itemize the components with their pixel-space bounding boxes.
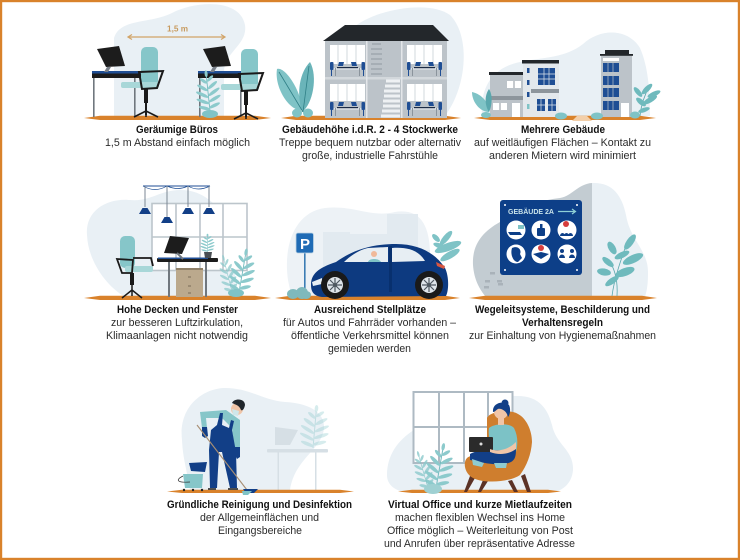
left chair: [121, 47, 163, 117]
light wall: [592, 183, 648, 297]
caption: Gebäudehöhe i.d.R. 2 - 4 Stockwerke: [282, 124, 458, 136]
desk: [157, 236, 218, 297]
left plant: [472, 89, 492, 118]
caption: [106, 304, 248, 342]
chair body: [465, 411, 532, 482]
head: [231, 403, 243, 415]
fern plant: [193, 69, 223, 118]
ground: [281, 116, 461, 120]
caption: und Anrufen über repräsentative Adresse: [384, 538, 575, 550]
bushes: [555, 112, 640, 120]
ground: [84, 116, 271, 120]
icon: no handshake: [532, 244, 550, 264]
caption: [167, 499, 352, 537]
gloves: [202, 427, 240, 459]
background blob: [287, 208, 430, 297]
icon: no groups: [558, 220, 576, 240]
armchair: [464, 411, 532, 492]
panel: Geräumige Büros: [84, 4, 271, 149]
caption: zur besseren Luftzirkulation,: [111, 317, 243, 329]
caption: [283, 304, 456, 355]
shirt and arms: [200, 410, 240, 448]
caption: machen flexiblen Wechsel ins Home: [395, 512, 565, 524]
sign: GEBÄUDE 2A: [508, 208, 554, 216]
bush: [287, 287, 311, 299]
caption: anderen Mietern wird minimiert: [489, 150, 636, 162]
low building: [489, 72, 524, 117]
caption: für Autos und Fahrräder vorhanden –: [283, 317, 456, 329]
mid building: [522, 60, 559, 117]
caption: Wegeleitsysteme, Beschilderung und: [475, 304, 650, 316]
window: [152, 203, 247, 270]
plant: [431, 229, 463, 264]
faded desk and plant: [267, 404, 332, 490]
caption: Mehrere Gebäude: [521, 124, 605, 136]
caption: Treppe bequem nutzbar oder alternativ: [279, 137, 462, 149]
bucket: [178, 462, 207, 491]
mop: [197, 425, 258, 495]
background blob: [114, 4, 245, 116]
desk plant: [200, 234, 215, 258]
panel: Mehrere Gebäude: [472, 32, 661, 162]
panel: Gründliche Reinigung: [167, 388, 354, 537]
caption: Ausreichend Stellplätze: [314, 304, 426, 316]
ground: [275, 296, 460, 300]
chair legs: [464, 474, 531, 492]
building: [323, 25, 449, 118]
car: [311, 244, 448, 299]
ground: [469, 296, 657, 300]
caption: [279, 124, 462, 162]
caption: Hohe Decken und Fenster: [117, 304, 239, 316]
right desk: [198, 46, 250, 117]
caption: Gründliche Reinigung und Desinfektion: [167, 499, 352, 511]
bricks: [484, 272, 503, 288]
parking sign: [296, 233, 314, 296]
pale skyline: [323, 214, 430, 290]
caption: öffentliche Verkehrsmittel können: [291, 330, 449, 342]
caption: große, industrielle Fahrstühle: [302, 150, 438, 162]
caption: auf weitläufigen Flächen – Kontakt zu: [474, 137, 651, 149]
caption: Verhaltensregeln: [522, 317, 603, 329]
right chair: [221, 49, 263, 119]
ground: [84, 296, 271, 300]
parking sign: P: [300, 236, 310, 253]
panel: Wegeleitsysteme: [469, 183, 657, 342]
woman: [469, 400, 517, 468]
caption: 1,5 m Abstand einfach möglich: [105, 137, 250, 149]
pendant lamps: [139, 186, 215, 223]
caption: [384, 499, 575, 550]
background blob: [182, 388, 324, 490]
caption: [474, 124, 651, 162]
panel: Virtual Office: [384, 392, 575, 550]
background blob: [387, 394, 573, 491]
panel: Hohe Decken und Fenster: [84, 186, 271, 342]
sign: [500, 200, 582, 275]
ground: [398, 490, 561, 493]
fern plant: [215, 246, 259, 297]
icon: distance: [558, 244, 576, 264]
caption: Eingangsbereiche: [218, 525, 302, 537]
tower: [600, 50, 633, 117]
chair: [117, 236, 153, 298]
plant: [277, 62, 314, 118]
dimension arrow: 1,5 m: [167, 24, 188, 34]
ground: [474, 116, 656, 120]
caption: [105, 124, 250, 149]
caption: [469, 304, 656, 342]
caption: Virtual Office und kurze Mietlaufzeiten: [388, 499, 572, 511]
ground: [167, 490, 354, 493]
panel: Gebäudehöhe: [277, 7, 464, 162]
icon: disinfectant bottle: [532, 220, 550, 240]
left desk: [92, 46, 144, 117]
window: [413, 392, 513, 463]
gray wall: [473, 183, 592, 297]
caption: der Allgemeinflächen und: [200, 512, 319, 524]
person: [200, 399, 245, 489]
panel: Ausreichend Stellplätze: [275, 208, 463, 355]
plant: [409, 441, 458, 494]
dimension arrow: [128, 24, 225, 40]
icon: face mask: [506, 244, 526, 264]
caption: Geräumige Büros: [136, 124, 218, 136]
caption: Klimaanlagen nicht notwendig: [106, 330, 248, 342]
plant: [596, 233, 645, 296]
caption: Office möglich – Weiterleitung von Post: [387, 525, 573, 537]
path: [572, 116, 592, 121]
right plant: [632, 82, 661, 116]
background blob: [482, 32, 650, 116]
background blob: [87, 190, 235, 297]
caption: gemieden werden: [328, 343, 411, 355]
overalls: [209, 413, 237, 488]
caption: zur Einhaltung von Hygienemaßnahmen: [469, 330, 656, 342]
icon: hand washing: [506, 220, 526, 240]
background blob: [350, 7, 464, 116]
